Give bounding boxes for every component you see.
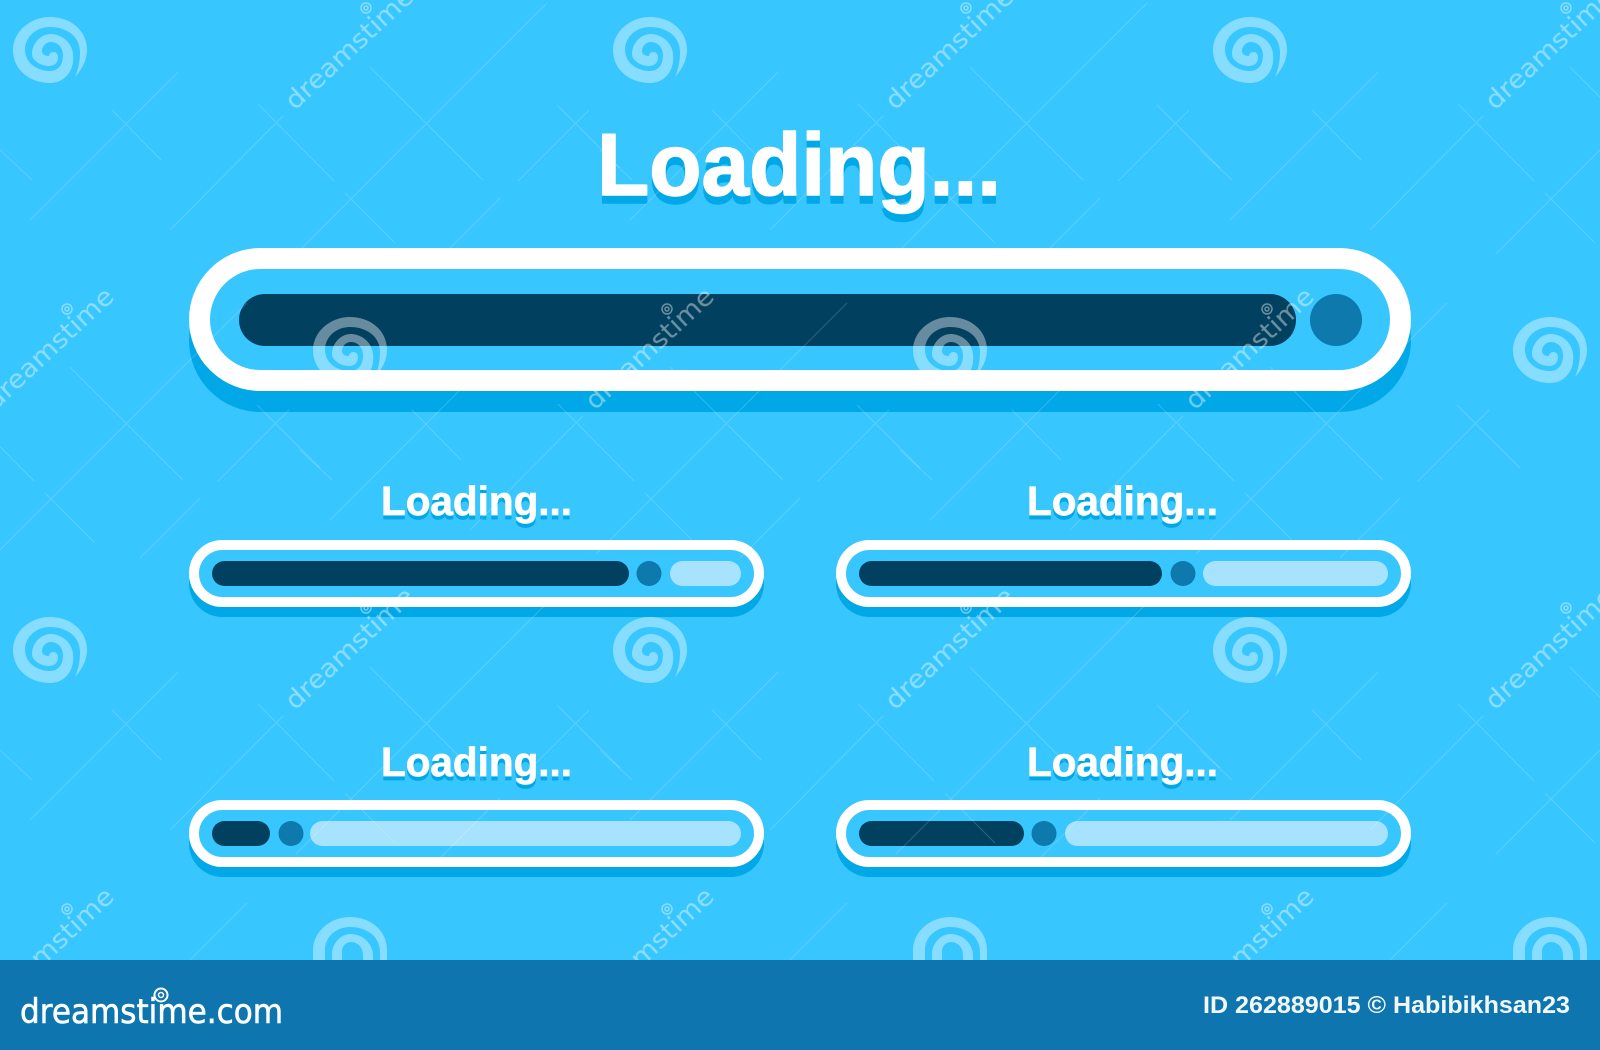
- label: bottom left bar: Loading...: [381, 739, 572, 785]
- watermark overlay: dreamstime: [1179, 282, 1320, 416]
- footer image id and credit: ID 262889015 © Habibikhsan23: [1203, 992, 1570, 1019]
- progress bar: bottom left: [189, 805, 764, 877]
- watermark overlay: dreamstime: [279, 582, 420, 716]
- label: top right bar: Loading...: [1027, 482, 1218, 528]
- progress bar: top left: [189, 545, 764, 617]
- label: bottom right bar: Loading...: [1027, 743, 1218, 789]
- main title: Loading...: [597, 115, 1001, 214]
- progress bar: bottom right: [836, 805, 1411, 877]
- watermark overlay: dreamstime: [579, 282, 720, 416]
- watermark overlay: dreamstime: [879, 582, 1020, 716]
- label: bottom right bar: Loading...: [1027, 739, 1218, 785]
- label: top right bar: Loading...: [1027, 478, 1218, 524]
- watermark overlay: dreamstime: [579, 882, 720, 1016]
- watermark overlay: dreamstime: [1179, 882, 1320, 1016]
- footer band: [0, 960, 1600, 1050]
- footer logo: dreamstime.com: [20, 992, 283, 1032]
- label: top left bar: Loading...: [381, 478, 572, 524]
- label: bottom left bar: Loading...: [381, 743, 572, 789]
- label: top left bar: Loading...: [381, 482, 572, 528]
- main title: Loading...: [597, 123, 1001, 222]
- main progress bar: [189, 258, 1411, 412]
- progress bar: top right: [836, 545, 1411, 617]
